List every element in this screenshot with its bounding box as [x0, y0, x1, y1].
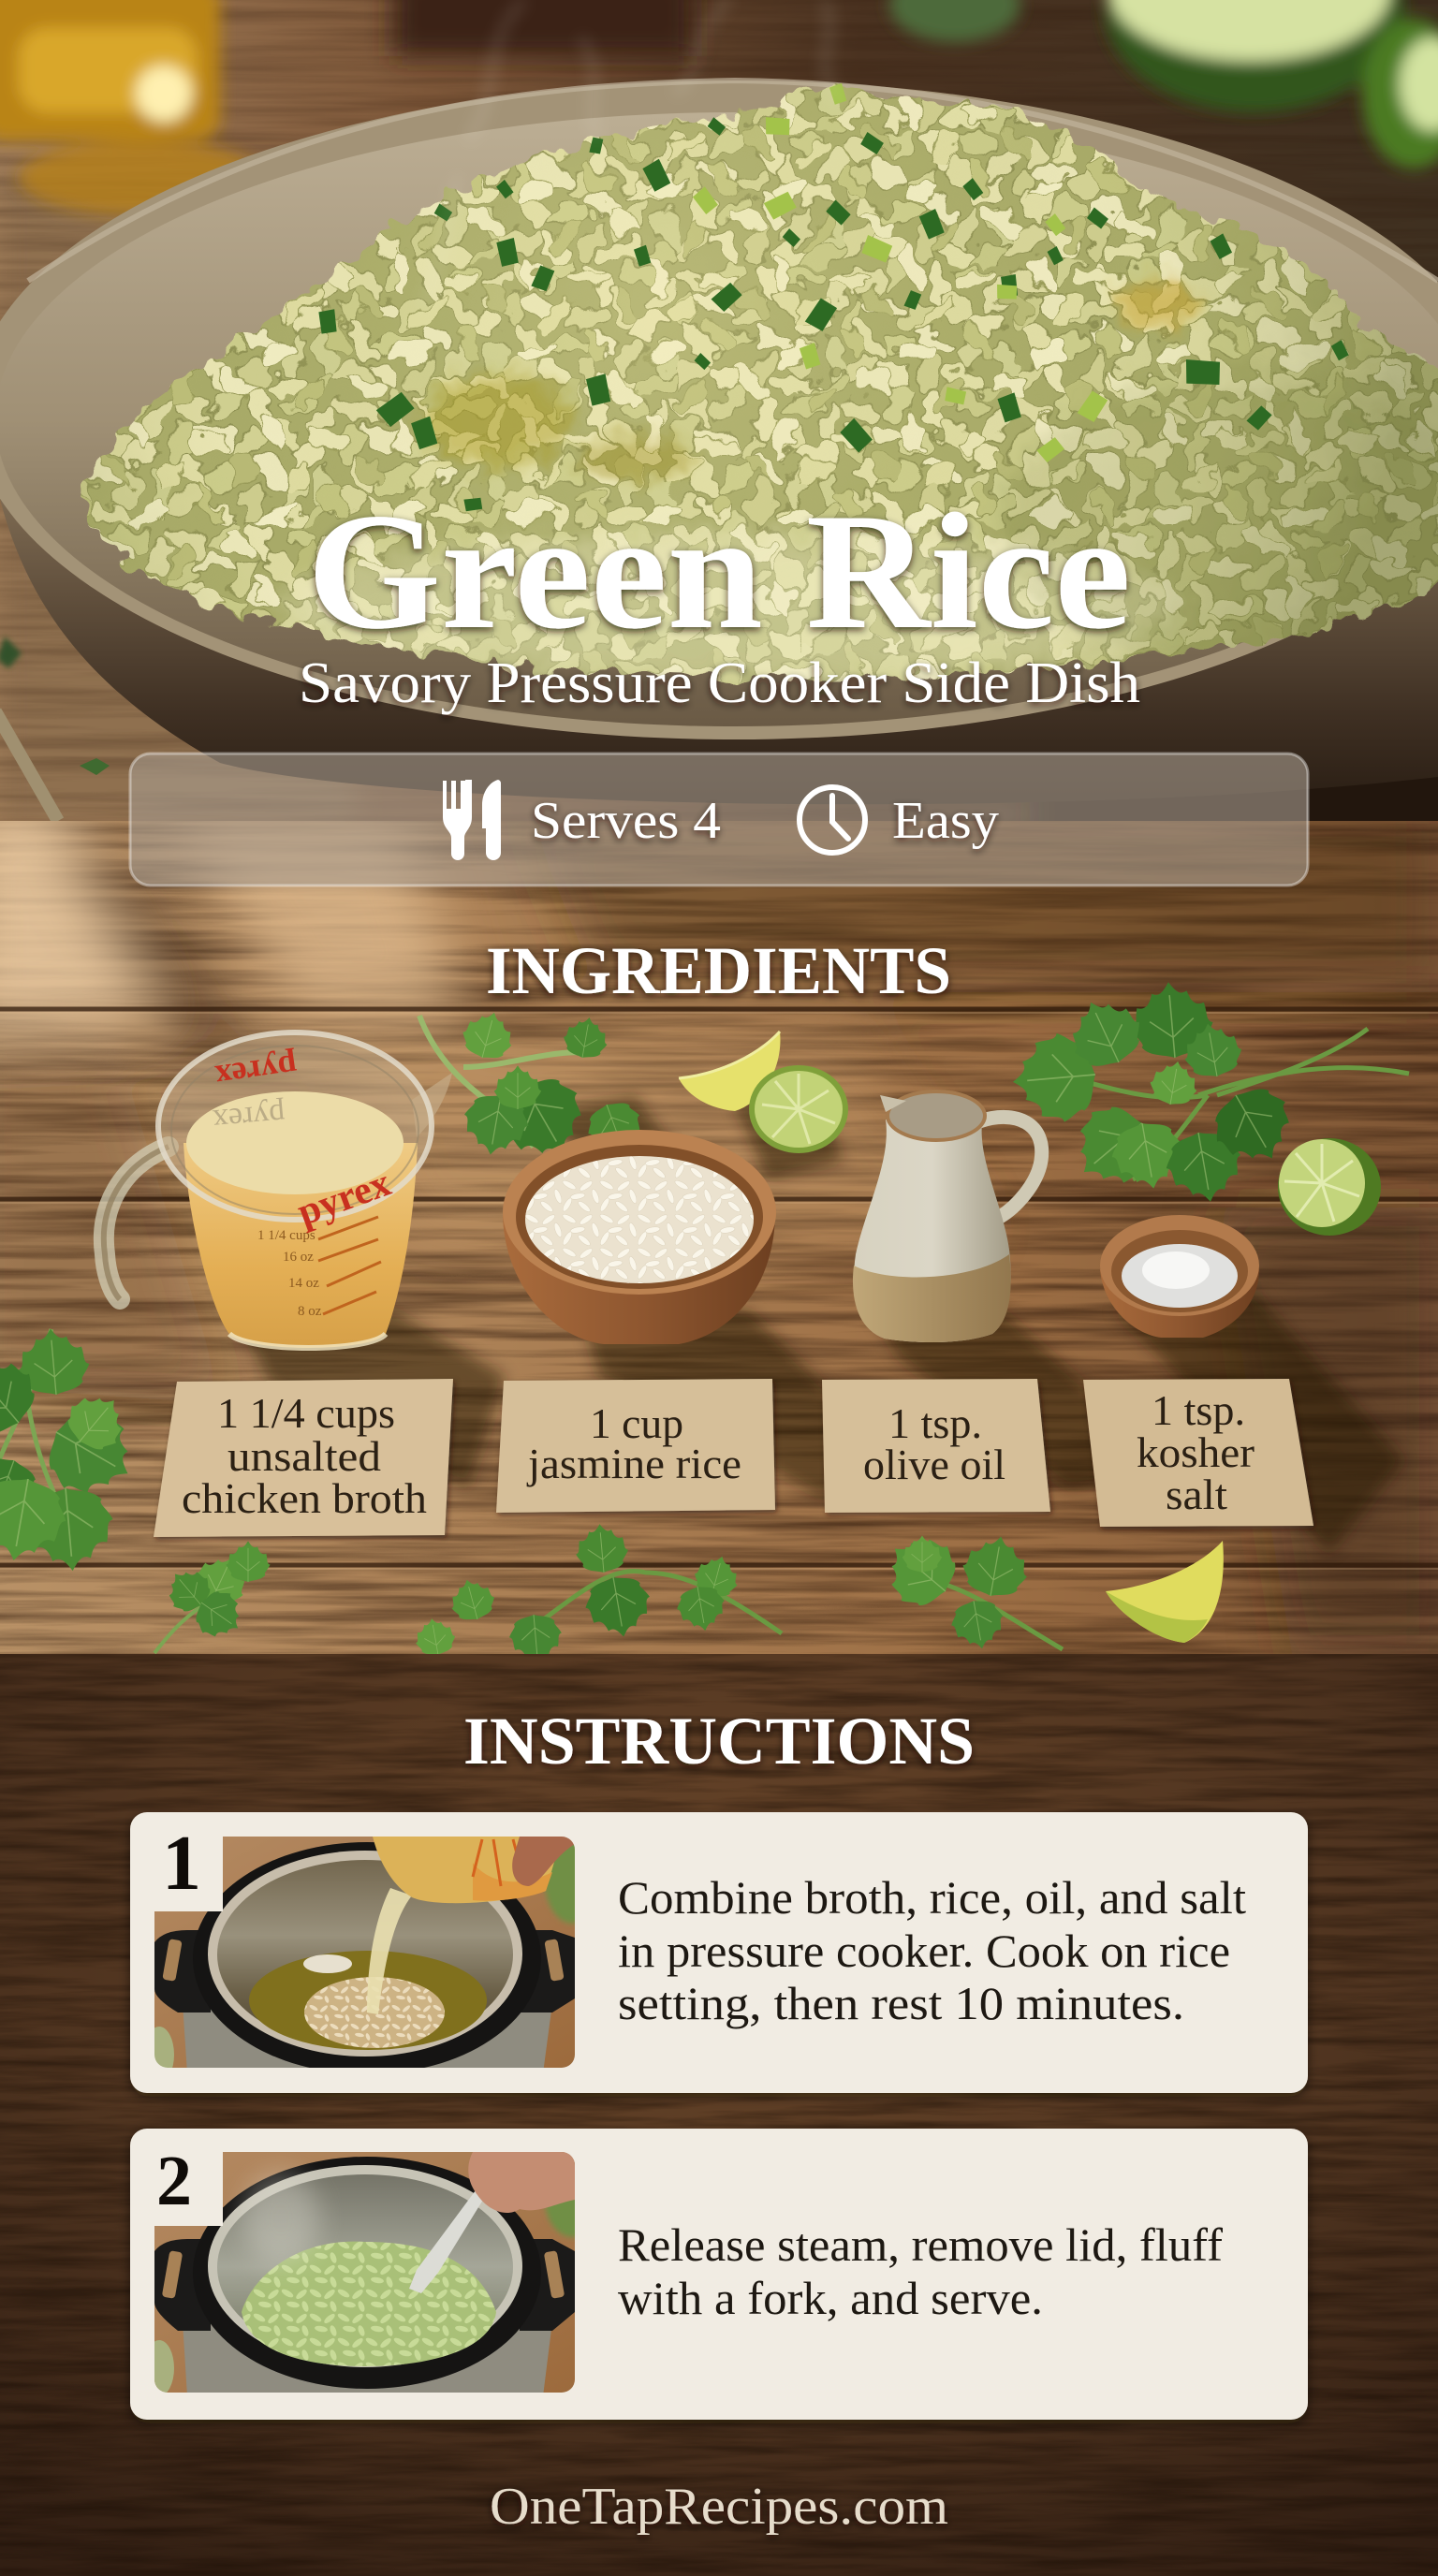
icon: lime wedge and slice — [679, 1032, 848, 1153]
step card 1 — [130, 1812, 1308, 2093]
icon: measuring cup of broth: 16 oz — [283, 1250, 314, 1265]
title: Green Rice — [307, 478, 1131, 664]
icon: ceramic oil pitcher — [853, 1091, 1042, 1342]
photo: fluffing rice with a fork — [144, 2152, 601, 2396]
panel: hero photo of green rice — [0, 0, 1438, 871]
icon: lime wedge bottom — [1106, 1541, 1224, 1643]
panel: instructions dark wood background — [0, 1654, 1438, 2576]
chopstick and herb on table — [0, 637, 110, 821]
icon: measuring cup of broth: pyrex — [212, 1097, 286, 1137]
ingredient label: salt — [1083, 1379, 1313, 1527]
footer website: OneTapRecipes.com — [490, 2478, 948, 2536]
ingredient label: olive oil — [822, 1379, 1050, 1513]
step 2 text: Release steam, remove lid, fluff — [618, 2218, 1223, 2271]
step 1 text: setting, then rest 10 minutes. — [618, 1977, 1184, 2029]
object shadows — [234, 1095, 1404, 1554]
sprig: cilantro left — [0, 1325, 150, 1574]
cilantro flecks — [318, 116, 1349, 511]
bowl — [0, 80, 1438, 804]
heading: ingredients: INGREDIENTS — [486, 933, 951, 1008]
panel: ingredients wood table — [0, 796, 1438, 1665]
ingredient label: rice — [496, 1379, 775, 1513]
step 1 text: Combine broth, rice, oil, and salt — [618, 1871, 1246, 1924]
icon: measuring cup of broth: 8 oz — [298, 1304, 322, 1319]
wood background — [0, 796, 1438, 1654]
ingredient label: rice: 1 cup — [590, 1399, 683, 1447]
ingredient label: olive oil: 1 tsp. — [888, 1399, 982, 1447]
icon: measuring cup of broth: pyrex — [213, 1047, 300, 1096]
ingredient label: olive oil: olive oil — [863, 1441, 1005, 1488]
subtitle: Savory Pressure Cooker Side Dish — [299, 651, 1140, 715]
sprig: cilantro bottom right — [872, 1521, 1063, 1653]
ingredient label: rice: jasmine rice — [526, 1440, 741, 1487]
icon: bowl of jasmine rice — [503, 1130, 776, 1344]
ingredient label: broth: 1 1/4 cups — [217, 1389, 395, 1437]
icon: lime wedges background — [889, 0, 1438, 168]
ingredient label: salt: kosher — [1137, 1428, 1255, 1476]
icon: measuring cup of broth: 1 1/4 cups — [257, 1228, 315, 1243]
ingredient label: salt: 1 tsp. — [1152, 1386, 1245, 1434]
plank seams — [0, 1009, 1438, 1565]
ingredient label: broth — [154, 1379, 453, 1537]
sprig: cilantro near cup — [419, 1006, 650, 1174]
icon: measuring cup of broth: 14 oz — [288, 1276, 319, 1291]
steam — [421, 0, 843, 309]
step 2 text — [618, 2218, 1223, 2324]
icon: measuring cup of broth — [104, 1032, 452, 1348]
ingredient label: broth: chicken broth — [182, 1474, 427, 1522]
hero background table — [0, 0, 1438, 871]
text: serves: Serves 4 — [531, 792, 721, 850]
icon: fork and knife — [443, 780, 501, 860]
icon: lime half right — [1278, 1138, 1381, 1236]
rice mound — [81, 82, 1438, 685]
step number 1: 1 — [162, 1820, 201, 1907]
icon: clock — [800, 787, 865, 853]
icon: bowl of kosher salt — [1100, 1215, 1259, 1338]
step 2 text: with a fork, and serve. — [618, 2272, 1043, 2324]
measuring marks — [318, 1217, 381, 1314]
sprig: cilantro bottom left — [154, 1541, 271, 1653]
ingredient label: salt: salt — [1166, 1471, 1227, 1518]
lime zest — [691, 82, 1110, 464]
icon: glass of oil — [0, 0, 262, 215]
sprig: cilantro bottom center — [412, 1522, 782, 1665]
step card 2 — [130, 2129, 1308, 2420]
heading: instructions: INSTRUCTIONS — [463, 1704, 975, 1778]
info bar — [130, 754, 1308, 886]
step 1 text: in pressure cooker. Cook on rice — [618, 1925, 1230, 1977]
step 1 text — [618, 1871, 1246, 2029]
text: easy: Easy — [892, 792, 999, 850]
photo: pouring broth into cooker — [144, 1837, 601, 2083]
sprig: parsley upper right — [1009, 978, 1409, 1208]
ingredient label: broth: unsalted — [227, 1432, 381, 1480]
brand text on cup: pyrex — [292, 1162, 396, 1235]
step number 2: 2 — [156, 2142, 192, 2220]
